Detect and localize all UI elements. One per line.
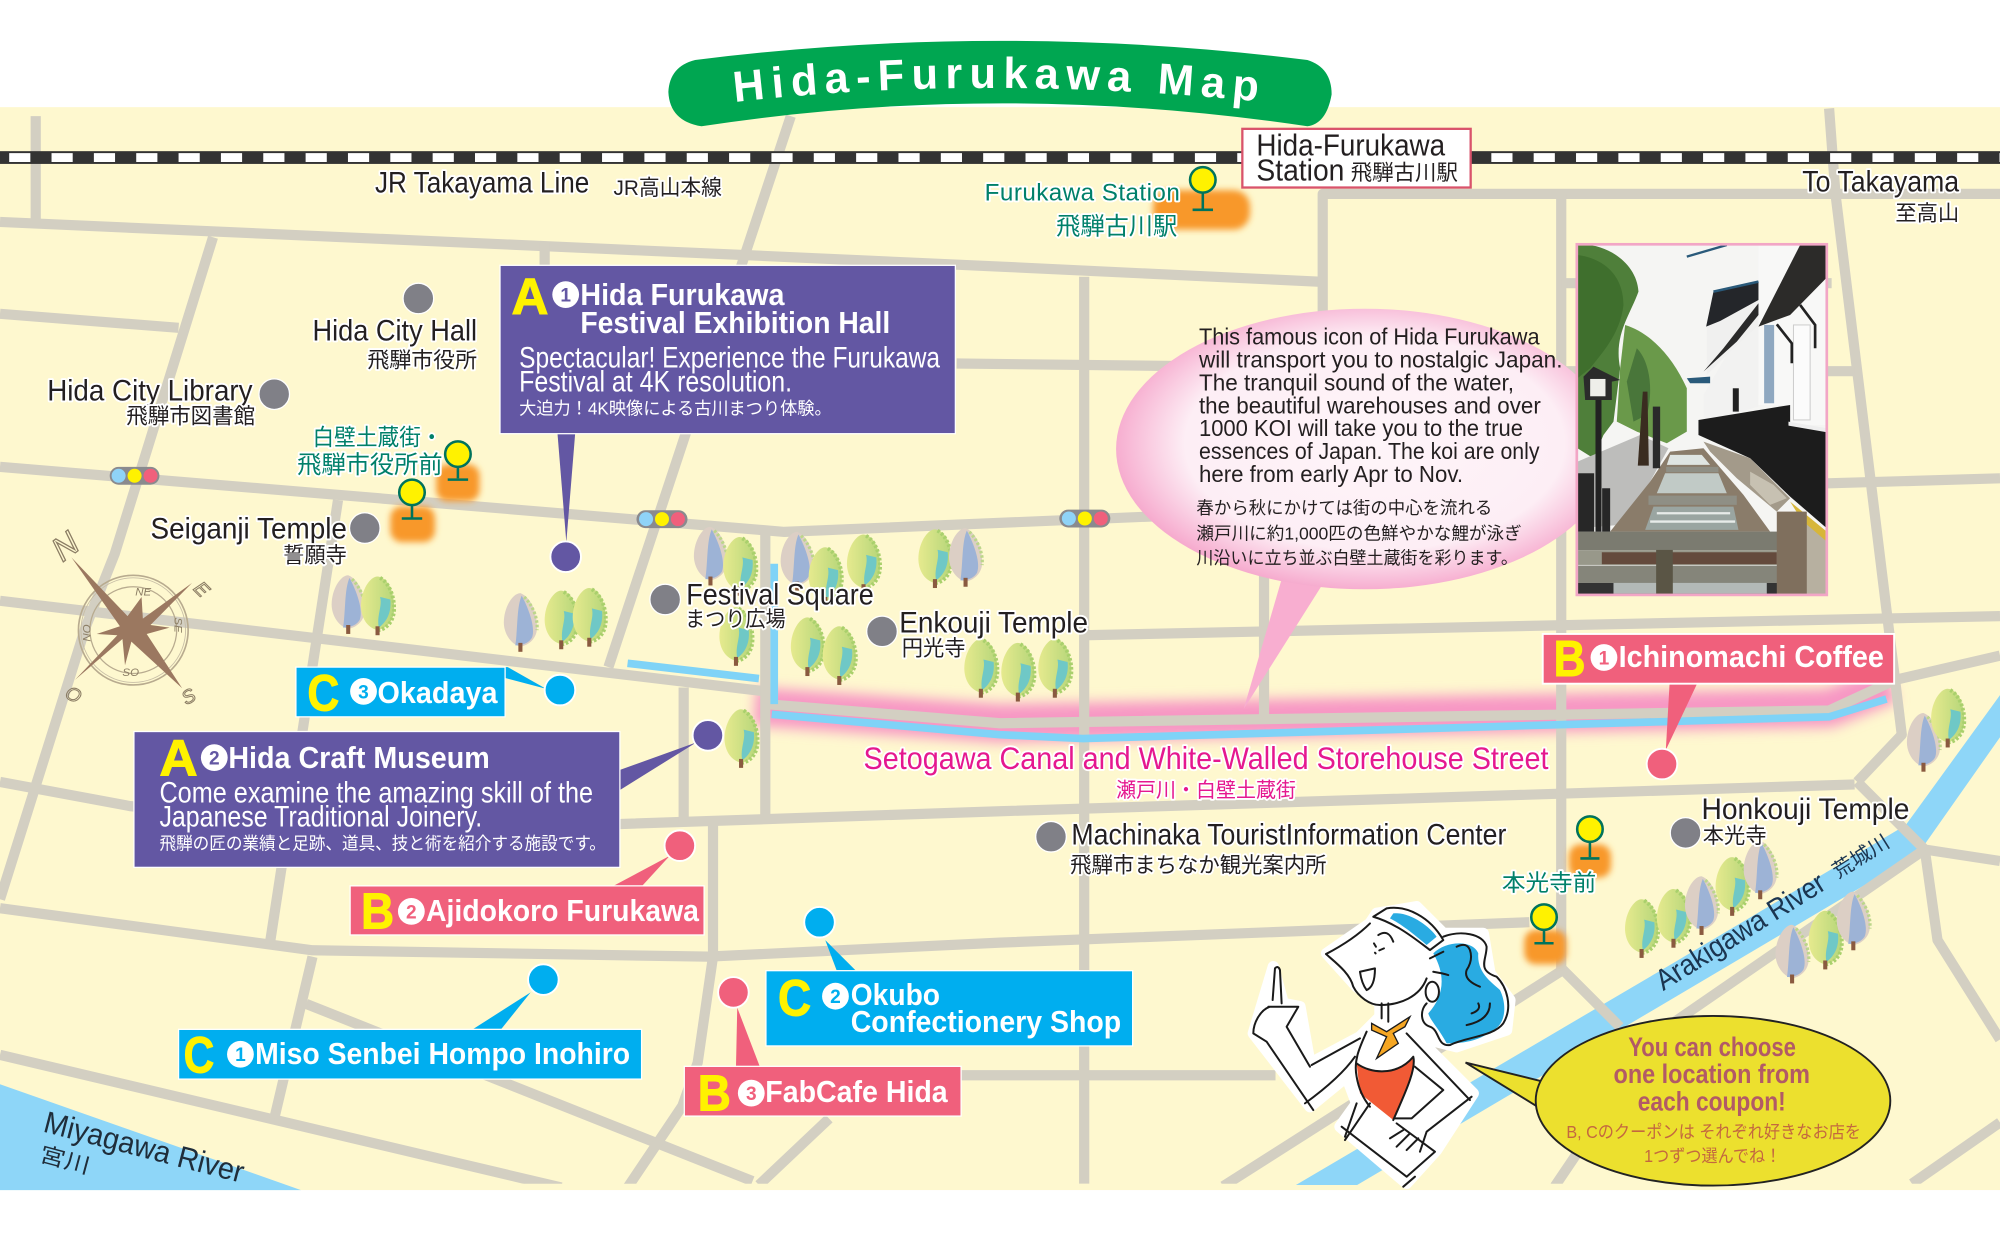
callout: A2 Hida Craft Museum: Japanese Traditional Joinery. <box>159 801 482 834</box>
place: Hida City Hall <box>312 283 477 372</box>
callout: C1 Miso Senbei Hompo Inohiro: Miso Senbei Hompo Inohiro <box>255 1037 630 1071</box>
speech bubble: coupon note: B, Cのクーポンは それぞれ好きなお店を <box>1566 1122 1861 1142</box>
compass rose: SE <box>172 617 184 633</box>
callout: C1 Miso Senbei Hompo Inohiro: C <box>184 1027 214 1084</box>
callout: C2 Okubo Confectionery Shop <box>766 907 1133 1046</box>
callout: B2 Ajidokoro Furukawa: Ajidokoro Furukawa <box>426 894 700 928</box>
callout: B2 Ajidokoro Furukawa: 2 <box>406 902 417 923</box>
To Takayama Japanese: 至高山 <box>1895 201 1959 226</box>
Miyagawa River label: Miyagawa River <box>40 1105 248 1190</box>
JR line Japanese label: JR高山本線 <box>614 175 722 200</box>
callout: C2 Okubo Confectionery Shop: Confectionery Shop <box>851 1005 1121 1039</box>
To Takayama: To Takayama <box>1802 165 1960 198</box>
trees <box>332 527 1964 983</box>
place: Machinaka Tourist Information Center: 飛騨市まちなか観光案内所 <box>1070 852 1327 877</box>
title: Hida-Furukawa Map <box>734 56 1258 108</box>
scarf <box>1372 1017 1410 1058</box>
callout: B1 Ichinomachi Coffee: 1 <box>1599 649 1610 670</box>
speech bubble: Setogawa description: 春から秋にかけては街の中心を流れる <box>1196 498 1492 518</box>
compass rose: E <box>189 578 213 602</box>
railway line <box>0 151 2000 164</box>
bus stop name: Shirakabe: 白壁土蔵街・ <box>312 424 443 450</box>
place: Festival Square: Festival Square <box>686 579 874 612</box>
place: Enkouji Temple <box>867 607 1088 661</box>
station sign box: Station <box>1256 154 1344 188</box>
place: Festival Square <box>650 579 874 631</box>
compass rose: NO <box>82 624 94 642</box>
speech bubble: Setogawa description: This famous icon of Hida Furukawa <box>1199 323 1540 349</box>
rivers <box>0 695 2000 1190</box>
callout: A1 Hida Furukawa Festival Exhibition Hall: A <box>511 268 548 325</box>
callout: C3 Okadaya: C <box>307 664 339 721</box>
callout: B2 Ajidokoro Furukawa <box>350 830 704 940</box>
bus stop: City Hall 2 <box>390 480 435 542</box>
Furukawa Station stop name: 飛騨古川駅 <box>1056 214 1177 241</box>
speech bubble: Setogawa description: 川沿いに立ち並ぶ白壁土蔵街を彩ります。 <box>1196 548 1518 568</box>
station sign box: 飛騨古川駅 <box>1351 160 1458 185</box>
speech bubble: Setogawa description: will transport you to nostalgic Japan. <box>1198 346 1562 372</box>
Setogawa canal label: 瀬戸川・白壁土蔵街 <box>1116 779 1296 802</box>
place: Hida City Library: 飛騨市図書館 <box>126 403 255 428</box>
compass rose: SO <box>122 667 139 679</box>
callout: B1 Ichinomachi Coffee: B <box>1554 630 1585 687</box>
Arakigawa River label <box>1649 830 1894 997</box>
ink line drawing <box>1253 908 1508 1187</box>
station sign box <box>1242 129 1471 188</box>
place: Hida City Hall: Hida City Hall <box>312 315 477 348</box>
apron <box>1357 1057 1414 1120</box>
place: Enkouji Temple: 円光寺 <box>902 636 966 661</box>
callout: A1 Hida Furukawa Festival Exhibition Hall: Festival at 4K resolution. <box>519 366 792 399</box>
bus stop: Honkouji 1 <box>1569 816 1611 878</box>
photo: Setogawa canal and storehouses <box>1577 244 1827 595</box>
callout: C3 Okadaya: 3 <box>358 682 369 703</box>
canal pink glow <box>755 684 1890 723</box>
callout: A2 Hida Craft Museum: 2 <box>209 749 220 770</box>
Furukawa Station stop name: Furukawa Station <box>985 179 1180 206</box>
callout: A1 Hida Furukawa Festival Exhibition Hall: Hida Furukawa <box>580 278 785 312</box>
compass rose: S <box>178 685 200 710</box>
callout: A1 Hida Furukawa Festival Exhibition Hall <box>500 265 955 572</box>
labels: top <box>375 165 1960 226</box>
bus stop name: Honkouji-mae: 本光寺前 <box>1502 869 1596 895</box>
traffic light 1 <box>110 467 159 485</box>
compass rose: NE <box>135 587 151 599</box>
place: Honkouji Temple: 本光寺 <box>1703 823 1767 848</box>
traffic light 3 <box>1059 510 1110 527</box>
callout: C2 Okubo Confectionery Shop: Okubo <box>851 978 940 1012</box>
speech bubble: Setogawa description: 瀬戸川に約1,000匹の色鮮やかな鯉が泳ぎ <box>1196 524 1522 544</box>
callout: A2 Hida Craft Museum: Hida Craft Museum <box>228 741 490 775</box>
place: Festival Square: まつり広場 <box>685 606 786 631</box>
Setogawa canal label: Setogawa Canal and White-Walled Storehouse Street <box>864 740 1549 776</box>
place: Seiganji Temple: Seiganji Temple <box>151 512 347 545</box>
compass rose <box>45 525 213 710</box>
title banner <box>668 40 1332 126</box>
traffic light 2 <box>636 510 688 528</box>
callout: A2 Hida Craft Museum <box>134 720 723 867</box>
station sign box: Hida-Furukawa <box>1256 129 1446 163</box>
callout: C2 Okubo Confectionery Shop: C <box>778 969 811 1026</box>
callout: B3 FabCafe Hida: 3 <box>746 1084 757 1105</box>
character white outline <box>1253 907 1510 1183</box>
callout: A1 Hida Furukawa Festival Exhibition Hall: Spectacular! Experience the Furukawa <box>519 341 941 374</box>
speech bubble: Setogawa description: essences of Japan. The koi are only <box>1199 438 1540 464</box>
speech bubble: Setogawa description: The tranquil sound of the water, <box>1199 369 1514 395</box>
bus stop name: Shirakabe: 飛騨市役所前 <box>297 452 443 479</box>
callout: C1 Miso Senbei Hompo Inohiro: 1 <box>235 1045 246 1066</box>
Furukawa Station stop name <box>985 179 1180 241</box>
speech bubble: coupon note: one location from <box>1614 1059 1810 1089</box>
place: Machinaka Tourist Information Center: Machinaka TouristInformation Center <box>1071 818 1507 851</box>
Miyagawa River water <box>0 1084 301 1190</box>
compass rose: O <box>61 683 85 708</box>
speech bubble: Setogawa description: here from early Apr to Nov. <box>1199 461 1463 487</box>
callout: B3 FabCafe Hida <box>684 977 961 1121</box>
bus stop: Furukawa Station <box>1153 167 1250 230</box>
place: Honkouji Temple <box>1670 793 1909 848</box>
place: Machinaka Tourist Information Center <box>1036 818 1507 877</box>
callout: C3 Okadaya: Okadaya <box>378 676 498 710</box>
speech bubble: Setogawa description: 1000 KOI will take you to the true <box>1199 415 1523 441</box>
callout: C3 Okadaya <box>296 664 575 721</box>
speech bubble: coupon note: 1つずつ選んでね！ <box>1644 1146 1781 1166</box>
speech bubble: Setogawa description <box>1116 309 1614 709</box>
callout: A1 Hida Furukawa Festival Exhibition Hall: Festival Exhibition Hall <box>580 306 890 340</box>
callout: A2 Hida Craft Museum: Come examine the amazing skill of the <box>159 776 593 809</box>
bus stop name: Shirakabe <box>297 424 443 479</box>
place: Enkouji Temple: Enkouji Temple <box>899 607 1088 640</box>
hair fill <box>1428 943 1504 1043</box>
compass rose: N <box>45 525 86 569</box>
place: Hida City Library <box>47 375 290 428</box>
Miyagawa River label: 宮川 <box>37 1141 93 1179</box>
callout: A2 Hida Craft Museum: 飛騨の匠の業績と足跡、道具、技と術を紹介する施設です。 <box>159 834 606 854</box>
place: Hida City Library: Hida City Library <box>47 375 253 408</box>
place: Seiganji Temple <box>151 512 380 568</box>
place: Honkouji Temple: Honkouji Temple <box>1702 793 1909 826</box>
Setogawa canal label <box>864 740 1549 802</box>
callout: A1 Hida Furukawa Festival Exhibition Hall: 1 <box>560 286 571 307</box>
character: woman pointing <box>1253 907 1510 1187</box>
Arakigawa River label: Arakigawa River <box>1649 866 1832 997</box>
callout: B1 Ichinomachi Coffee: Ichinomachi Coffee <box>1619 640 1884 674</box>
speech bubble: coupon note: You can choose <box>1628 1032 1796 1062</box>
callout: B1 Ichinomachi Coffee <box>1543 630 1894 779</box>
Arakigawa River water <box>1296 695 2000 1185</box>
speech bubble: coupon note: each coupon! <box>1638 1086 1786 1116</box>
bus stop: City Hall 1 <box>436 441 480 501</box>
callout: C1 Miso Senbei Hompo Inohiro <box>179 964 642 1084</box>
callout: A2 Hida Craft Museum: A <box>159 730 198 787</box>
callout: B3 FabCafe Hida: B <box>698 1064 731 1121</box>
canal water <box>628 564 1886 739</box>
place: Hida City Hall: 飛騨市役所 <box>367 347 477 372</box>
callout: B2 Ajidokoro Furukawa: B <box>361 883 394 940</box>
speech bubble: coupon note <box>1466 1016 1890 1186</box>
callout: C2 Okubo Confectionery Shop: 2 <box>830 987 841 1008</box>
bandana fill <box>1390 913 1437 945</box>
Arakigawa River label: 荒城川 <box>1828 830 1894 883</box>
callout: A1 Hida Furukawa Festival Exhibition Hall: 大迫力！4K映像による古川まつり体験。 <box>519 399 832 419</box>
JR Takayama Line label: JR Takayama Line <box>375 167 589 200</box>
place: Seiganji Temple: 誓願寺 <box>283 543 347 568</box>
bus stop: Honkouji 2 <box>1524 904 1566 964</box>
callout: B3 FabCafe Hida: FabCafe Hida <box>765 1075 949 1109</box>
speech bubble: Setogawa description: the beautiful warehouses and over <box>1199 392 1541 418</box>
